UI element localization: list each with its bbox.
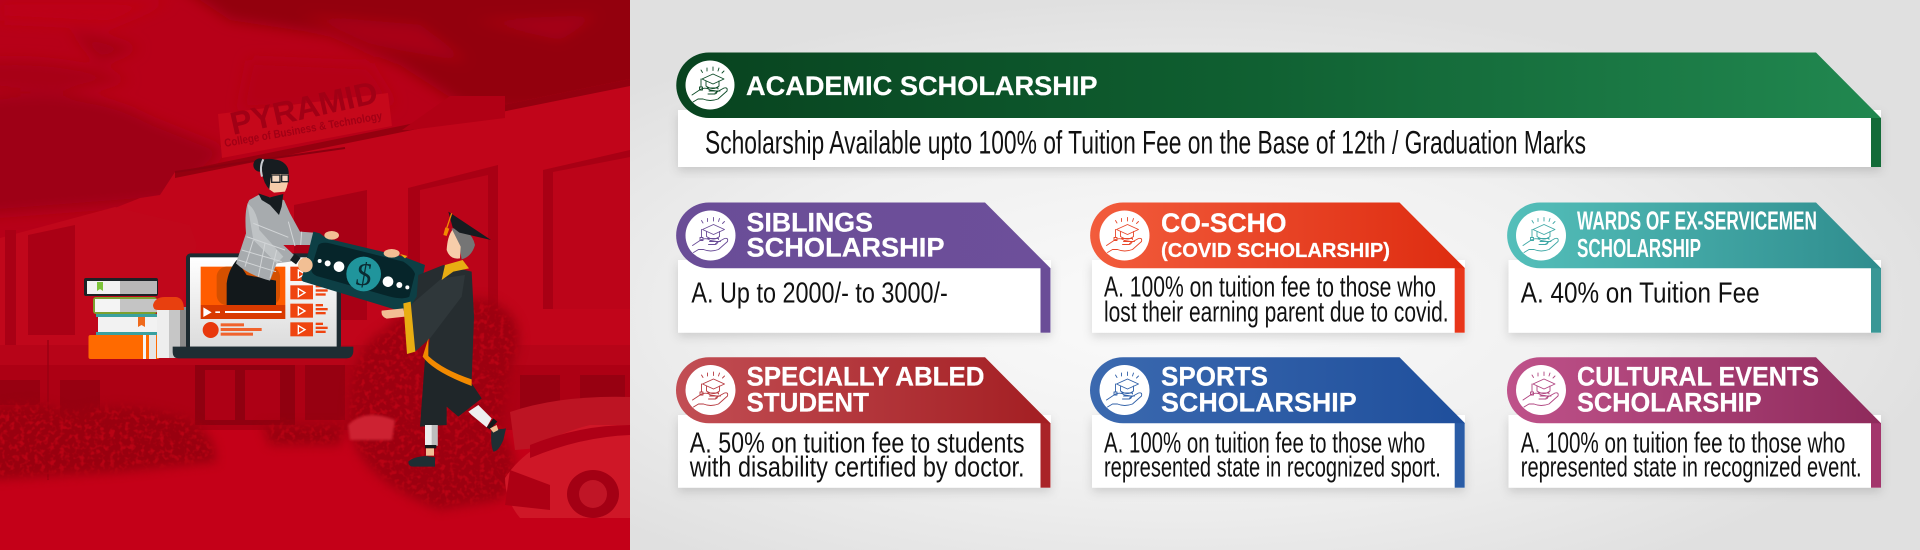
body box: [1508, 260, 1881, 333]
graduate student: [403, 212, 506, 467]
header band: [1507, 202, 1881, 268]
heading: ACADEMIC SCHOLARSHIP: [746, 71, 1098, 101]
accent strip: [1871, 268, 1881, 333]
panel: siblings scholarship: [676, 202, 1051, 333]
heading: CO-SCHO: [1161, 208, 1286, 238]
panel: covid scholarship: (COVID SCHOLARSHIP): [1161, 239, 1390, 262]
building: [0, 79, 630, 480]
body box: [1508, 415, 1881, 488]
body box: [678, 260, 1051, 333]
description: A. 100% on tuition fee to those who: [1104, 272, 1436, 304]
panel: sports scholarship: represented state in recognized sport.: [1104, 452, 1441, 484]
panel: siblings scholarship: SCHOLARSHIP: [746, 233, 944, 263]
accent strip: [1871, 118, 1881, 167]
icon: scholarship hand: [686, 60, 734, 110]
panel: cultural events scholarship: [1507, 357, 1881, 488]
panel: academic scholarship: [676, 52, 1881, 167]
heading: SIBLINGS: [746, 208, 873, 238]
header band: [1090, 202, 1465, 268]
panel: wards of ex-servicemen scholarship: SCHOLARSHIP: [1577, 233, 1701, 263]
body box: [678, 110, 1881, 167]
icon: scholarship hand: [686, 365, 736, 415]
icon: scholarship hand: [1516, 210, 1566, 260]
panel: sports scholarship: SCHOLARSHIP: [1161, 388, 1357, 418]
header band: [676, 357, 1050, 423]
heading: CULTURAL EVENTS: [1577, 362, 1819, 392]
heading: SPORTS: [1161, 362, 1268, 392]
laptop: [173, 253, 353, 358]
heading: SPECIALLY ABLED: [746, 362, 984, 392]
panel: specially abled student: STUDENT: [746, 388, 869, 418]
header band: [676, 52, 1881, 118]
panel: red campus photo: [0, 0, 650, 550]
header band: [676, 202, 1050, 268]
body box: [1092, 260, 1465, 333]
panel: sports scholarship: [1090, 357, 1465, 488]
accent strip: [1040, 268, 1050, 333]
sign: Pyramid college: College of Business & Technology: [223, 110, 384, 150]
banknote: $: [356, 256, 372, 292]
description: Scholarship Available upto 100% of Tuition Fee on the Base of 12th / Graduation Marks: [705, 124, 1586, 160]
icon: scholarship hand: [1100, 365, 1150, 415]
banknote: [298, 231, 425, 319]
description: A. Up to 2000/- to 3000/-: [691, 278, 948, 310]
body box: [1092, 415, 1465, 488]
accent strip: [1871, 423, 1881, 488]
description: A. 100% on tuition fee to those who: [1104, 427, 1425, 459]
panel: covid scholarship: lost their earning parent due to covid.: [1104, 297, 1449, 329]
panel: specially abled student: [676, 357, 1051, 488]
illustration: scholarship handover: [84, 158, 506, 467]
header band: [1090, 357, 1465, 423]
description: A. 50% on tuition fee to students: [690, 427, 1024, 459]
accent strip: [1455, 423, 1465, 488]
panel: cultural events scholarship: SCHOLARSHIP: [1577, 388, 1762, 418]
icon: scholarship hand: [1100, 210, 1150, 260]
accent strip: [1455, 268, 1465, 333]
body box: [678, 415, 1051, 488]
header band: [1507, 357, 1881, 423]
description: A. 40% on Tuition Fee: [1521, 278, 1760, 310]
page background: [630, 0, 1920, 550]
sky with clouds: [0, 0, 650, 240]
woman at laptop: [227, 158, 313, 305]
panel: wards of ex-servicemen scholarship: [1507, 202, 1881, 333]
icon: scholarship hand: [686, 210, 736, 260]
icon: scholarship hand: [1516, 365, 1566, 415]
accent strip: [1040, 423, 1050, 488]
sign: Pyramid college: PYRAMID: [227, 74, 381, 142]
trees and cars: [0, 298, 630, 518]
sign: Pyramid college: [175, 74, 392, 172]
books stack: [84, 278, 186, 359]
panel: specially abled student: with disability certified by doctor.: [689, 452, 1024, 484]
panel: covid scholarship: [1090, 202, 1465, 333]
